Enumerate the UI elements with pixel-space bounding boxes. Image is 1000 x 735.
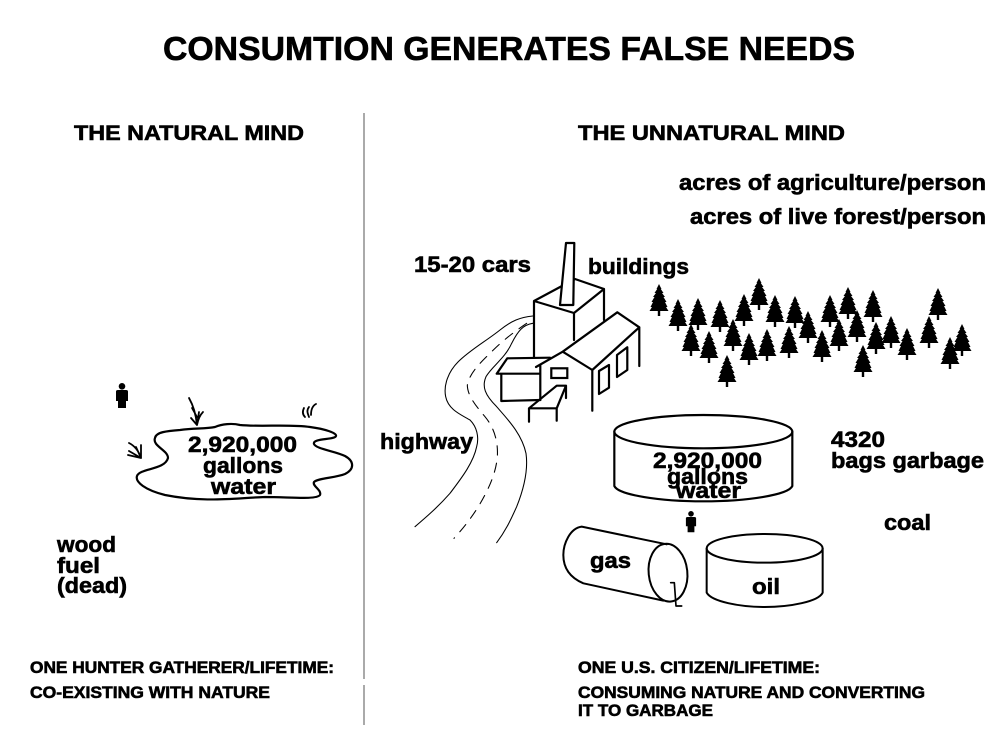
wood fuel label: fuel (57, 553, 100, 578)
gas label: gas (590, 548, 631, 573)
agriculture label: acres of agriculture/person (679, 170, 986, 195)
caption: hunter gatherer: CO-EXISTING WITH NATURE (30, 684, 270, 702)
wood fuel label: wood (56, 532, 116, 557)
garbage label (831, 427, 984, 473)
pond label: water (210, 474, 276, 499)
highway label: highway (380, 429, 473, 454)
wood fuel label: (dead) (57, 573, 127, 598)
icon: person, U.S. citizen (686, 511, 696, 532)
cars label: 15-20 cars (414, 252, 531, 277)
pond label: gallons (203, 453, 283, 478)
pond label (188, 432, 297, 499)
water tank label (653, 448, 762, 503)
coal label: coal (884, 510, 931, 535)
heading: the natural mind: THE NATURAL MIND (74, 122, 304, 145)
caption: hunter gatherer (30, 659, 334, 702)
wood fuel label (56, 532, 127, 598)
illustration: oil tank (707, 534, 823, 607)
water tank label: water (675, 478, 741, 503)
center divider (363, 113, 365, 725)
water tank label: 2,920,000 (653, 448, 762, 473)
icon: person, hunter gatherer (116, 383, 128, 408)
illustration: gas tank (563, 527, 690, 606)
oil tank outline (707, 534, 823, 607)
illustration: forest (650, 278, 972, 387)
caption: U.S. citizen (578, 659, 925, 720)
water tank label: gallons (667, 464, 748, 489)
caption: hunter gatherer: ONE HUNTER GATHERER/LIFETIME: (30, 659, 334, 677)
garbage label: bags garbage (831, 448, 984, 473)
panel: the unnatural mind (380, 122, 986, 720)
heading: the unnatural mind: THE UNNATURAL MIND (578, 122, 845, 145)
illustration: water tank (614, 415, 792, 503)
icon: grass tufts (128, 398, 316, 458)
side building (497, 358, 550, 401)
water tank outline (614, 415, 792, 501)
forest label: acres of live forest/person (690, 204, 986, 229)
pond with water label (137, 424, 352, 499)
gas cylinder (563, 527, 690, 606)
porch (529, 386, 566, 422)
factory box and smokestack (534, 243, 604, 357)
panel: the natural mind (30, 122, 352, 702)
pond outline (137, 424, 352, 499)
buildings label: buildings (588, 254, 689, 279)
illustration: factory buildings (497, 243, 639, 422)
pond label: 2,920,000 (188, 432, 297, 457)
oil label: oil (752, 574, 780, 599)
caption: U.S. citizen: ONE U.S. CITIZEN/LIFETIME: (578, 659, 820, 677)
caption: U.S. citizen: CONSUMING NATURE AND CONVERTING (578, 684, 925, 702)
title: CONSUMTION GENERATES FALSE NEEDS (163, 30, 855, 67)
garbage label: 4320 (831, 427, 885, 452)
long building (536, 312, 639, 411)
illustration: highway (415, 316, 533, 543)
caption: U.S. citizen: IT TO GARBAGE (578, 702, 713, 720)
